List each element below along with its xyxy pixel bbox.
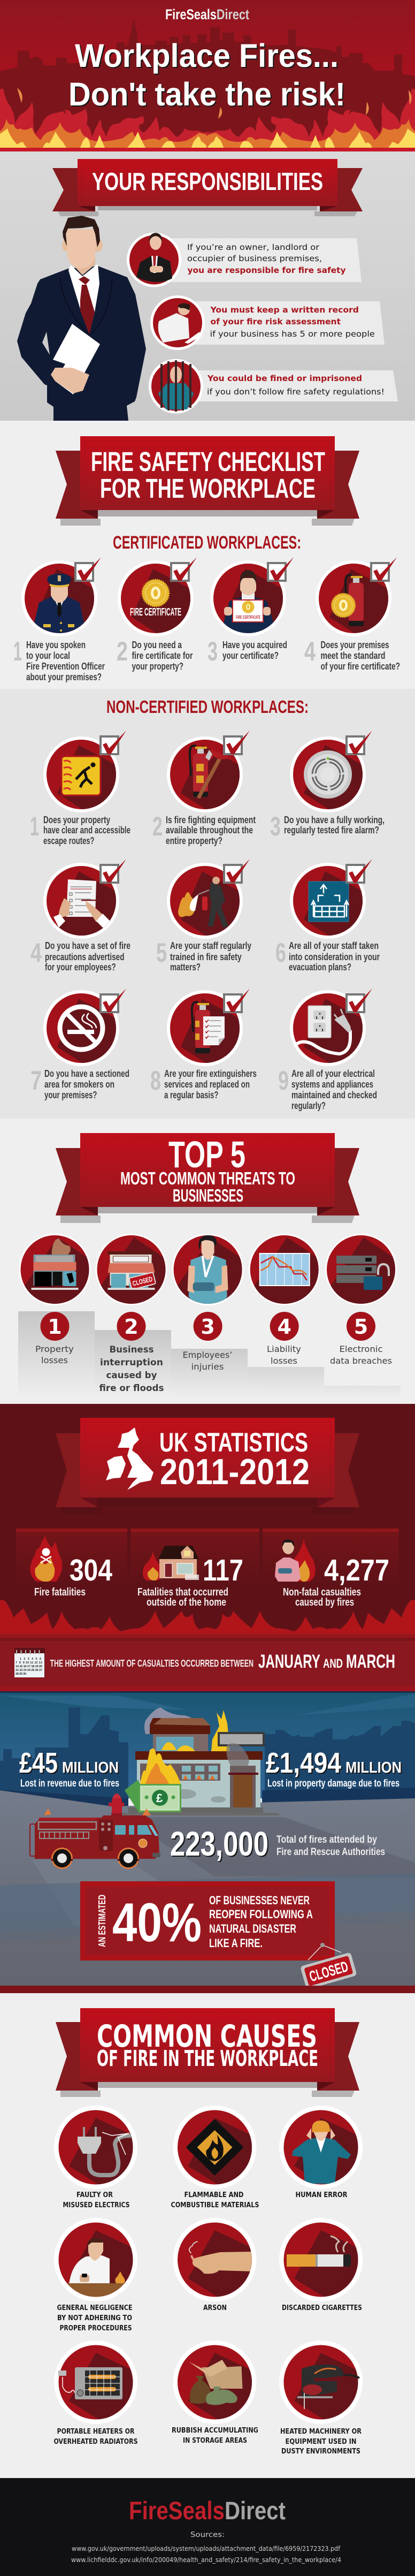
item 2: written record: You must keep a written record: [210, 305, 359, 315]
question 5: Are your staff regularly: [170, 940, 251, 951]
stat: revenue lost: £45: [19, 1747, 58, 1779]
item 1: responsible for fire safety: you are responsible for fire safety: [187, 265, 345, 275]
label: human error: HUMAN ERROR: [295, 2191, 348, 2199]
footer: [0, 2478, 415, 2576]
number 2 and label: fire or floods: [99, 1383, 164, 1394]
heading: certificated workplaces: CERTIFICATED WORKPLACES:: [113, 533, 301, 553]
question 8: [150, 1066, 257, 1100]
icon: man holding certificate: FIRE CERTIFICATE: [236, 615, 260, 620]
item 3: fined or imprisoned: You could be fined or imprisoned: [207, 374, 362, 383]
label: faulty electrics: [63, 2191, 129, 2209]
panel: UK statistics: [0, 1404, 415, 1634]
question 2: Is fire fighting equipment: [166, 815, 256, 825]
callout: 40% of businesses: [80, 1881, 335, 1961]
callout: 40% of businesses: REOPEN FOLLOWING A: [209, 1908, 313, 1921]
checkbox: [347, 731, 372, 754]
panel: common causes: [0, 1993, 415, 2478]
item 3: fined or imprisoned: if you don’t follow fire safety regulations!: [207, 387, 385, 397]
stat: property damage: £1,494: [266, 1747, 341, 1779]
stat: non-fatal casualties: 4,277: [324, 1553, 389, 1587]
number 2 and label: caused by: [106, 1370, 157, 1381]
question 1: to your local: [26, 650, 70, 661]
question 2: available throughout the: [166, 825, 253, 835]
icon: burning banknote: [125, 1749, 181, 1813]
icon: extinguisher and service sheet: [167, 990, 248, 1071]
question 6: [275, 938, 380, 972]
question 1: Have you spoken: [26, 640, 86, 650]
icon: fire certificate: [118, 560, 198, 641]
question 2: [152, 811, 256, 846]
question 4: Does your premises: [321, 640, 389, 650]
question 3: Have you acquired: [222, 640, 287, 650]
label: heated machinery: HEATED MACHINERY OR: [280, 2428, 362, 2436]
number 4 and label: [267, 1312, 301, 1366]
icon: fire officer: [21, 560, 97, 636]
checkbox: [101, 989, 126, 1012]
label: flammable materials: COMBUSTIBLE MATERIALS: [171, 2201, 259, 2209]
icon: calendar: 28 29 30: [16, 1673, 26, 1676]
checkbox: [75, 557, 101, 581]
question 6: Are all of your staff taken: [289, 940, 379, 951]
question 8: services and replaced on: [164, 1079, 250, 1090]
icon: general negligence: [54, 2218, 141, 2305]
number 5 and label: 5: [354, 1315, 368, 1339]
stat: fire fatalities: [30, 1534, 112, 1598]
number 2 and label: interruption: [100, 1357, 163, 1368]
number 3 and label: [183, 1312, 232, 1372]
header bottom stripe: [0, 148, 415, 151]
checkbox: [101, 731, 126, 754]
question 2: 2: [117, 636, 128, 666]
question 2: 2: [152, 811, 163, 841]
caption: revenue lost: Lost in revenue due to fires: [20, 1778, 119, 1789]
label: flammable materials: FLAMMABLE AND: [184, 2191, 244, 2199]
icon: heated machinery: [279, 2341, 366, 2428]
number 5 and label: Electronic: [339, 1344, 383, 1354]
number 1 and label: 1: [48, 1315, 62, 1339]
number 1 and label: [35, 1312, 74, 1365]
illustration: burning building: [119, 1707, 280, 1815]
text: highest amount of casualties: THE HIGHEST AMOUNT OF CASUALTIES OCCURRED BETWEEN: [50, 1658, 253, 1669]
icon: arson: [173, 2218, 260, 2305]
question 9: [278, 1066, 377, 1111]
icon: calendar: 1 2 3 4 5 6: [17, 1658, 41, 1661]
item 1: responsible for fire safety: occupier of business premises,: [187, 254, 322, 263]
callout: 40% of businesses: LIKE A FIRE.: [209, 1936, 263, 1950]
question 1: about your premises?: [26, 672, 102, 682]
panel: January and March band: [0, 1634, 415, 1691]
banner: UK statistics: 2011-2012: [160, 1452, 310, 1492]
text: highest amount of casualties: [50, 1651, 395, 1672]
panel: fire safety checklist: [0, 421, 415, 689]
icon: extinguisher and axe: [167, 736, 248, 817]
banner: top 5: [56, 1133, 359, 1223]
question 5: matters?: [170, 962, 201, 972]
icon: closed sign: [300, 1943, 357, 1990]
banner: common causes: COMMON CAUSES: [97, 2019, 317, 2054]
question 7: Do you have a sectioned: [44, 1068, 129, 1079]
banner: UK statistics: [56, 1418, 359, 1514]
stat: non-fatal casualties: Non-fatal casualties: [283, 1586, 361, 1598]
text: highest amount of casualties: JANUARY: [258, 1651, 320, 1672]
question 2: Do you need a: [132, 640, 182, 650]
caption: fires attended: Fire and Rescue Authorities: [276, 1846, 385, 1858]
number 1 and label: losses: [41, 1355, 68, 1365]
label: general negligence: BY NOT ADHERING TO: [57, 2314, 132, 2322]
label: heated machinery: [280, 2428, 362, 2456]
icon: fire certificate: FIRE CERTIFICATE: [130, 606, 181, 618]
banner: fire safety checklist: [56, 436, 359, 526]
callout: 40% of businesses: 40%: [112, 1892, 202, 1953]
footer: FireSealsDirect: [129, 2496, 286, 2525]
question 4: 4: [304, 636, 316, 666]
callout: 40% of businesses: AN ESTIMATED: [97, 1895, 107, 1947]
label: heated machinery: DUSTY ENVIRONMENTS: [281, 2448, 360, 2456]
question 3: [208, 636, 287, 666]
item 2: written record: of your fire risk assessment: [211, 317, 341, 326]
icon: calendar: 14 15 16 17 18 19 20: [16, 1665, 42, 1668]
question 3: [270, 811, 385, 841]
label: faulty electrics: FAULTY OR: [76, 2191, 113, 2199]
label: portable heaters: OVERHEATED RADIATORS: [53, 2438, 138, 2446]
question 5: 5: [156, 938, 167, 968]
banner: your responsibilities: [52, 159, 363, 216]
question 1: [13, 636, 105, 682]
checkbox: [347, 989, 372, 1012]
number 3 and label: 3: [201, 1315, 215, 1339]
question 9: maintained and checked: [291, 1090, 377, 1100]
icon: fire hydrant: [109, 1794, 124, 1816]
question 7: area for smokers on: [44, 1079, 114, 1090]
question 4: meet the standard: [321, 650, 385, 661]
label: discarded cigarettes: DISCARDED CIGARETTES: [282, 2304, 362, 2312]
question 1: Does your property: [43, 815, 110, 825]
text: highest amount of casualties: MARCH: [346, 1651, 395, 1672]
number 4 and label: 4: [277, 1315, 291, 1339]
question 2: your property?: [132, 661, 183, 672]
stat: property damage: [266, 1747, 402, 1779]
question 3: 3: [270, 811, 281, 841]
question 5: trained in fire safety: [170, 952, 242, 962]
stat: fire fatalities: 304: [70, 1553, 112, 1587]
number 5 and label: [330, 1312, 392, 1366]
checkbox: [268, 557, 294, 581]
label: arson: ARSON: [203, 2304, 227, 2312]
number 2 and label: [99, 1312, 164, 1394]
question 5: [156, 938, 251, 972]
question 1: 1: [13, 636, 22, 666]
callout: 40% of businesses: OF BUSINESSES NEVER: [209, 1894, 310, 1907]
question 9: 9: [278, 1066, 289, 1096]
icon: discarded cigarette: [279, 2218, 366, 2305]
icon: electrical socket and plug: [290, 990, 371, 1071]
number 3 and label: injuries: [191, 1362, 224, 1372]
stat panels: [16, 1529, 399, 1598]
label: general negligence: [57, 2304, 133, 2332]
stat: fatalities outside of the home: outside of the home: [147, 1597, 226, 1608]
item 1: responsible for fire safety: If you’re an owner, landlord or: [187, 242, 320, 252]
stat: fatalities outside of the home: Fatalities that occurred: [137, 1586, 228, 1598]
number 4 and label: losses: [271, 1356, 297, 1366]
icon: fire engine: [30, 1808, 160, 1869]
question 1: have clear and accessible: [43, 825, 130, 835]
question 8: a regular basis?: [164, 1090, 218, 1100]
icon: electronic data: [325, 1234, 404, 1312]
stat: non-fatal casualties: [275, 1539, 389, 1608]
number 1 and label: Property: [35, 1344, 74, 1354]
icon: escape route sign: [43, 736, 124, 817]
question 4: precautions advertised: [45, 952, 124, 962]
icon: man holding certificate: [210, 560, 286, 636]
question 6: into consideration in your: [289, 952, 380, 962]
label: portable heaters: PORTABLE HEATERS OR: [57, 2428, 135, 2436]
question 7: your premises?: [44, 1090, 97, 1100]
stat: non-fatal casualties: caused by fires: [295, 1597, 354, 1608]
icon: human error: [279, 2106, 366, 2193]
icon: closed shop: [95, 1234, 174, 1312]
question 2: [117, 636, 193, 672]
checkbox: [224, 989, 250, 1012]
number 5 and label: data breaches: [330, 1356, 392, 1366]
label: rubbish: IN STORAGE AREAS: [183, 2437, 247, 2445]
title: Workplace Fires...: [75, 37, 339, 74]
banner: top 5: TOP 5: [168, 1134, 245, 1175]
icon: closed shop: CLOSED: [132, 1275, 153, 1288]
header flames: [0, 88, 415, 148]
callout: 40% of businesses: NATURAL DISASTER: [209, 1922, 296, 1935]
icon: faulty electrics: [54, 2106, 141, 2193]
icon: evacuation plan: [290, 863, 371, 944]
item 2: written record: [150, 295, 385, 350]
question 3: your certificate?: [222, 650, 279, 661]
question 6: 6: [275, 938, 286, 968]
checkbox: [171, 557, 197, 581]
question 2: entire property?: [166, 835, 222, 846]
panel: top 5 threats: [0, 1119, 415, 1404]
label: general negligence: PROPER PROCEDURES: [60, 2324, 132, 2332]
question 3: Do you have a fully working,: [284, 815, 385, 825]
stat: 223,000 fires: 223,000: [170, 1825, 268, 1863]
section: header background: [0, 0, 415, 149]
step background: [18, 1311, 401, 1399]
question 1: 1: [30, 811, 39, 841]
bottom stripe of cost scene: [0, 1986, 415, 1993]
checkbox: [224, 731, 250, 754]
label: rubbish: [172, 2427, 258, 2445]
icon: damaged shop: [19, 1234, 97, 1312]
stat: property damage: MILLION: [345, 1759, 402, 1776]
logo: FireSealsDirect: [165, 6, 249, 22]
icon: liability chart: [249, 1234, 327, 1312]
number 4 and label: Liability: [267, 1344, 301, 1354]
icon: calendar: [14, 1648, 45, 1677]
stat: revenue lost: [19, 1747, 119, 1779]
panel: non-certified workplaces: [0, 689, 415, 1119]
question 4: for your employees?: [45, 962, 116, 972]
icon: certified extinguisher: [316, 560, 396, 641]
icon: rubbish: [173, 2341, 260, 2428]
banner: UK statistics: UK STATISTICS: [159, 1427, 308, 1457]
icon: staff using extinguisher: [167, 863, 248, 944]
header skyline: [0, 19, 415, 149]
title: Don't take the risk!: [68, 76, 345, 112]
question 1: escape routes?: [43, 835, 94, 846]
label: flammable materials: [171, 2191, 259, 2209]
banner: top 5: MOST COMMON THREATS TO: [120, 1168, 295, 1188]
label: rubbish: RUBBISH ACCUMULATING: [172, 2427, 258, 2435]
checkbox: [224, 859, 250, 883]
question 1: [30, 811, 130, 846]
question 9: regularly?: [291, 1100, 326, 1111]
icon: portable heater: [54, 2341, 141, 2428]
icon: calendar: 7 8 9 10 11 12 13: [16, 1661, 42, 1665]
checkbox: [371, 557, 397, 581]
number 3 and label: Employees’: [183, 1350, 232, 1360]
number 2 and label: Business: [109, 1344, 154, 1355]
checkbox: [101, 859, 126, 883]
footer: www.gov.uk/government/uploads/system/uploads/attachment_data/file/6959/2172323.pdf: [72, 2545, 341, 2552]
icon: injured employee: [172, 1234, 244, 1305]
icon: UK map: [106, 1427, 153, 1490]
question 8: Are your fire extinguishers: [164, 1068, 257, 1079]
question 8: 8: [150, 1066, 161, 1096]
item 3: fined or imprisoned: [149, 359, 398, 414]
question 9: systems and appliances: [291, 1079, 373, 1090]
stat: fatalities outside of the home: [137, 1546, 243, 1608]
caption: fires attended: Total of fires attended by: [276, 1834, 377, 1845]
question 6: evacuation plans?: [289, 962, 351, 972]
stat: revenue lost: MILLION: [62, 1759, 119, 1776]
question 9: Are all of your electrical: [291, 1068, 375, 1079]
label: general negligence: GENERAL NEGLIGENCE: [57, 2304, 133, 2312]
question 2: fire certificate for: [132, 650, 193, 661]
stat: fatalities outside of the home: 117: [203, 1553, 243, 1587]
item 1: responsible for fire safety: [127, 232, 362, 287]
panel: your responsibilities: [0, 151, 415, 421]
icon: no smoking: [43, 990, 124, 1071]
label: heated machinery: EQUIPMENT USED IN: [286, 2438, 356, 2446]
icon: flammable materials: [173, 2106, 260, 2193]
banner: your responsibilities: YOUR RESPONSIBILITIES: [92, 168, 323, 195]
checkbox: [347, 859, 372, 883]
heading: non-certified workplaces: NON-CERTIFIED WORKPLACES:: [106, 697, 309, 717]
footer: Sources:: [190, 2531, 225, 2539]
stat: fire fatalities: Fire fatalities: [34, 1586, 86, 1598]
icon: burning banknote: £: [156, 1791, 163, 1805]
question 4: Do you have a set of fire: [45, 940, 130, 951]
question 1: Fire Prevention Officer: [26, 661, 105, 672]
question 3: regularly tested fire alarm?: [284, 825, 379, 835]
label: portable heaters: [53, 2428, 138, 2446]
man in suit illustration: [17, 216, 146, 421]
title: [68, 37, 345, 112]
banner: common causes: [56, 2008, 359, 2097]
icon: calendar: 21 22 23 24 25 26 27: [16, 1669, 42, 1672]
item 2: written record: if your business has 5 or more people: [210, 329, 375, 339]
panel: cost scene background: [0, 1691, 415, 1986]
caption: fires attended: [276, 1834, 385, 1858]
icon: closed sign: CLOSED: [308, 1958, 350, 1985]
icon: fire precautions checklist: [43, 863, 119, 939]
footer: www.lichfielddc.gov.uk/info/200049/health_and_safety/214/fire_safety_in_the_workplace/4: [71, 2556, 341, 2564]
banner: top 5: BUSINESSES: [173, 1186, 243, 1205]
banner: fire safety checklist: FOR THE WORKPLACE: [100, 473, 316, 504]
label: faulty electrics: MISUSED ELECTRICS: [63, 2201, 129, 2209]
question 7: [30, 1066, 129, 1100]
question 4: [304, 636, 400, 672]
dark red flame band: [0, 1600, 415, 1634]
icon: smoke alarm: [290, 736, 371, 817]
question 4: [30, 938, 130, 972]
question 4: 4: [30, 938, 42, 968]
number 2 and label: 2: [124, 1315, 139, 1339]
text: highest amount of casualties: AND: [323, 1656, 343, 1671]
question 3: 3: [208, 636, 218, 666]
question 7: 7: [30, 1066, 42, 1096]
